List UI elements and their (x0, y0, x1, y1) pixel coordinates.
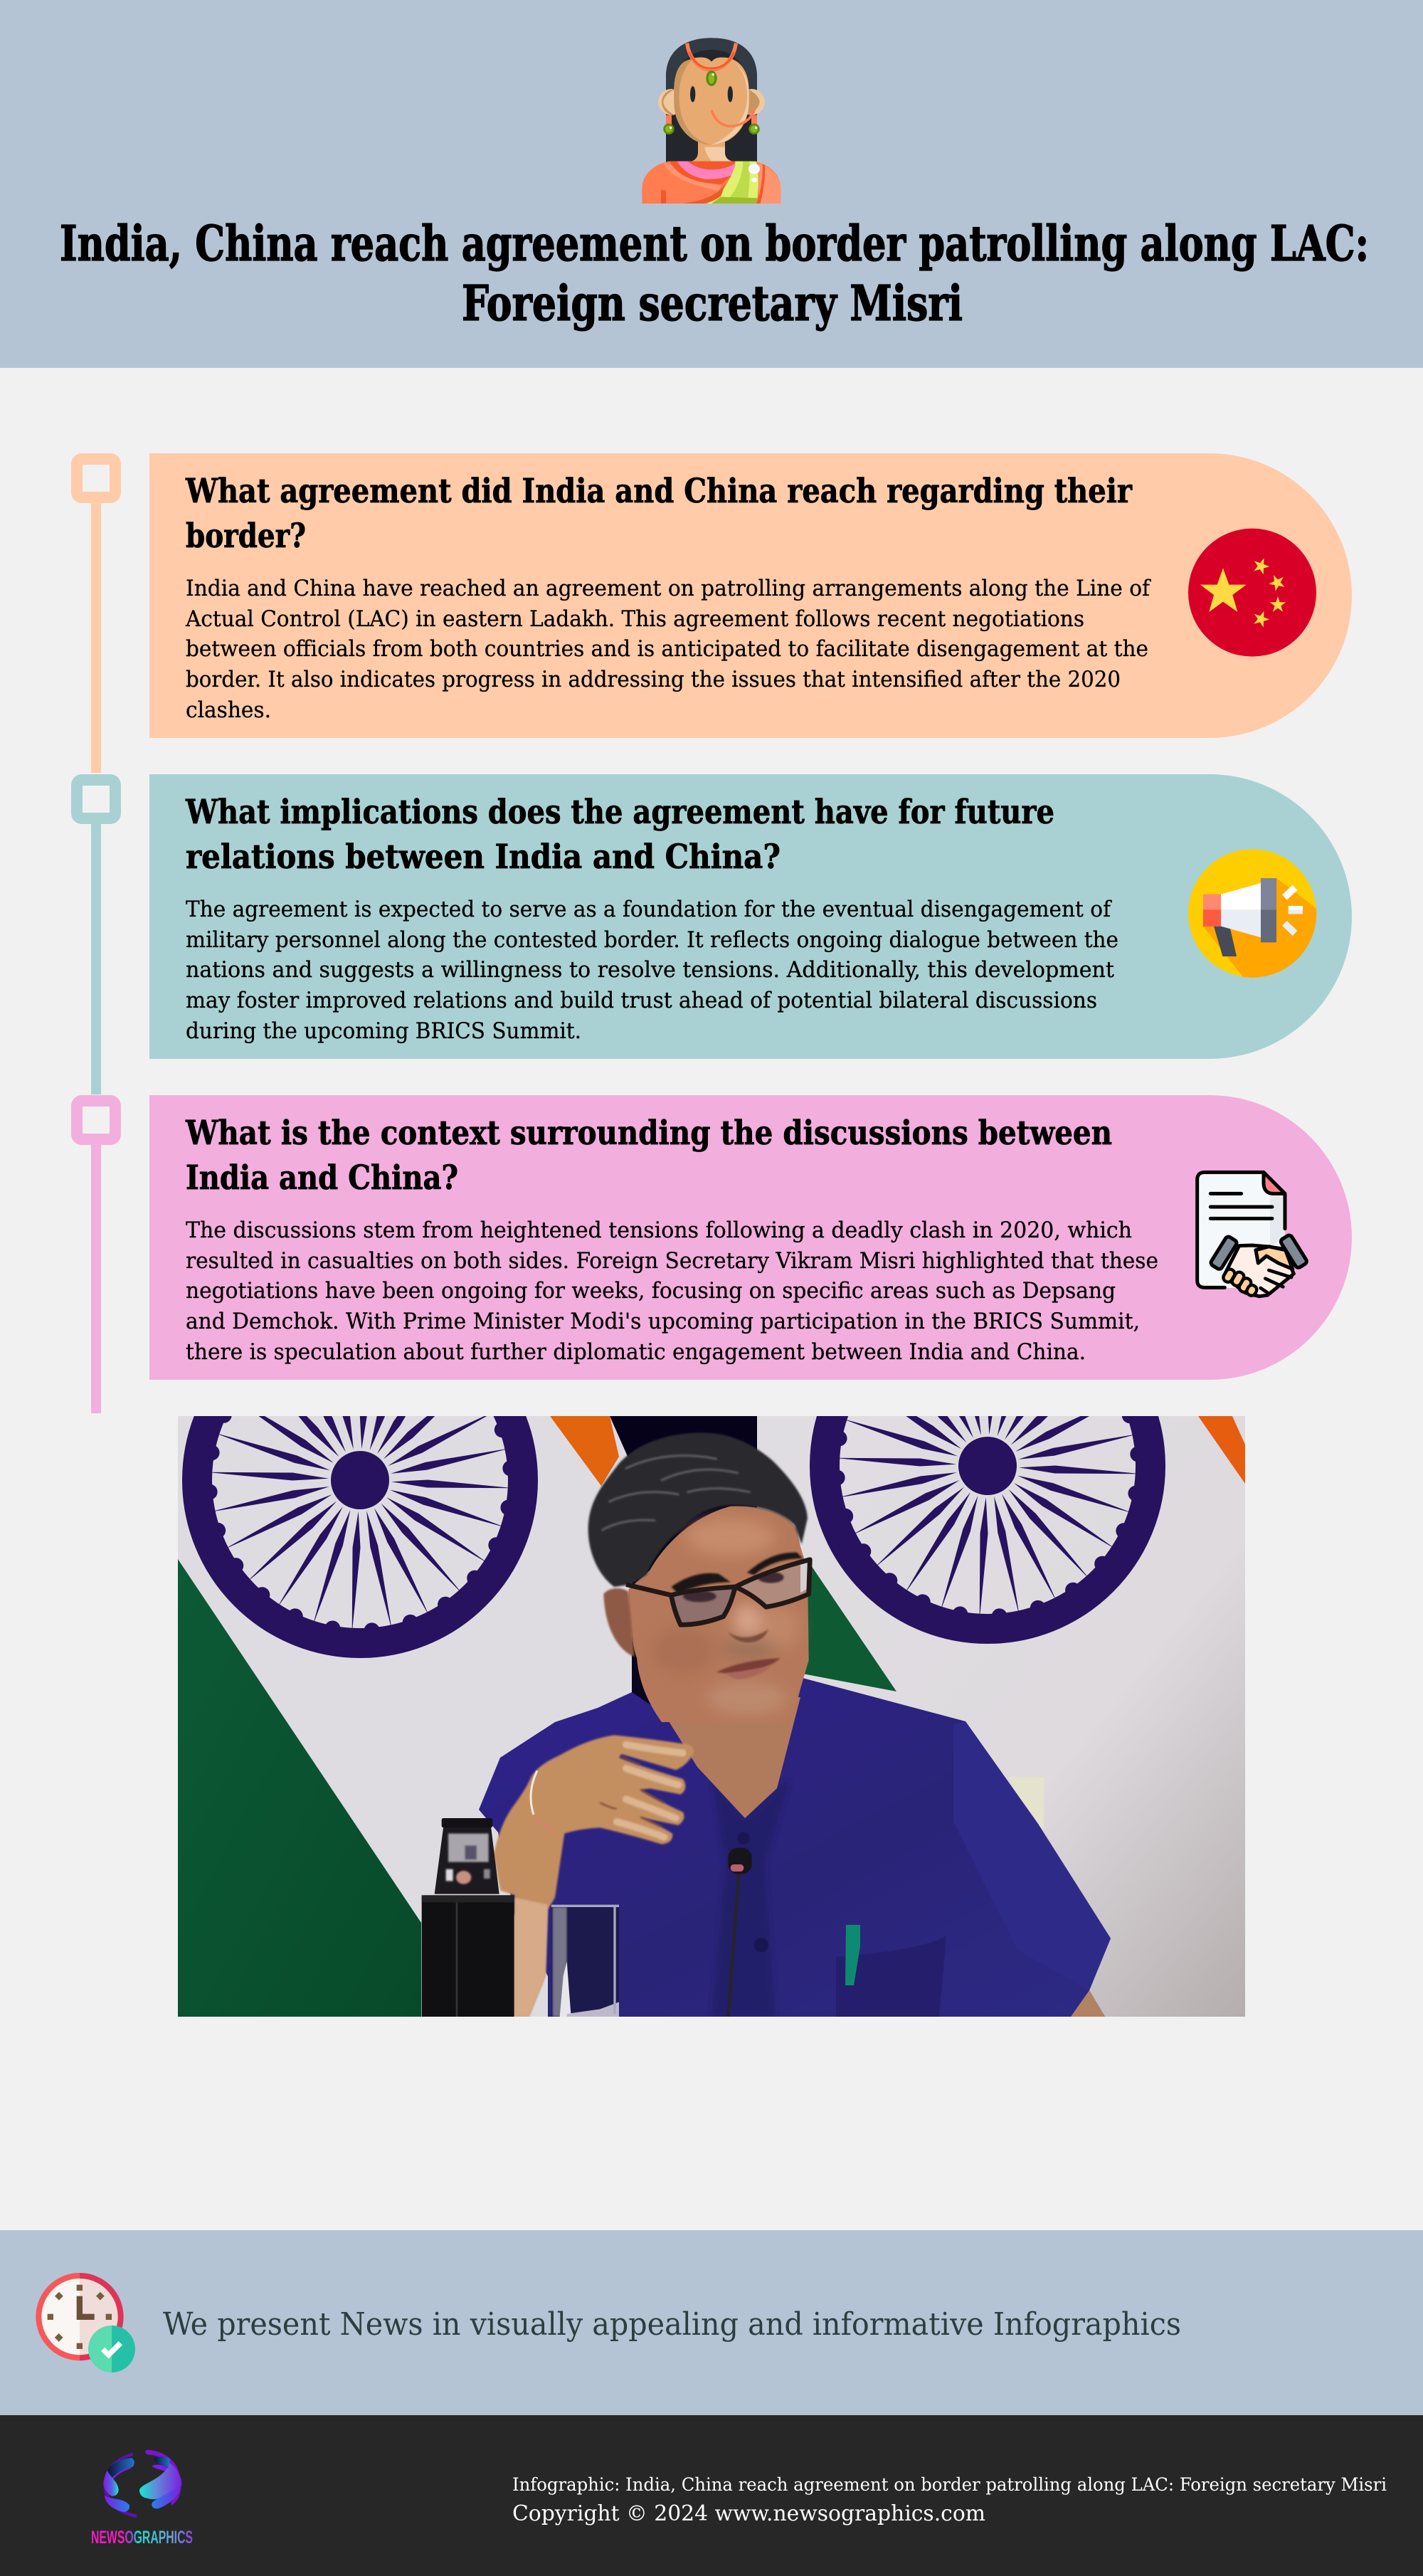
panel: card 3 (149, 1095, 1352, 1380)
title: Foreign secretary Misri (462, 275, 963, 332)
person: head with hair, face and glasses (588, 1432, 810, 1722)
text: card 1 body: between officials from both countries and is anticipated to facilitate disengagement at the (186, 636, 1148, 662)
text: card 1 body: Actual Control (LAC) in eastern Ladakh. This agreement follows recent negotiations (185, 606, 1084, 632)
heading: card 1 (185, 472, 1133, 556)
text: card 1 body: India and China have reached an agreement on patrolling arrangements along the Line of (186, 576, 1151, 601)
icon: document with handshake (1197, 1172, 1308, 1297)
title (60, 216, 1369, 332)
logo: Newsographics: NEWSOGRAPHICS (91, 2528, 193, 2548)
icon: megaphone (1188, 849, 1316, 978)
panel: card 2 (149, 774, 1352, 1059)
timeline: vertical connector with nodes (71, 453, 121, 1413)
text: card 3 body: there is speculation about further diplomatic engagement between India and China. (186, 1339, 1086, 1365)
icon: China flag (1188, 529, 1316, 657)
text: card 2 body: nations and suggests a willingness to resolve tensions. Additionally, this development (186, 957, 1114, 983)
timeline tail (91, 1380, 101, 1413)
far forearm (1071, 1990, 1105, 2017)
photo: Foreign Secretary Vikram Misri at press briefing (178, 1416, 1245, 2017)
text: copyright: Copyright © 2024 www.newsographics.com (512, 2501, 985, 2526)
text: card 2 body: The agreement is expected to serve as a foundation for the eventual disengagement of (186, 897, 1112, 922)
panel: card 1 (149, 453, 1352, 738)
text: card 2 body (186, 897, 1118, 1044)
text: card 2 body: military personnel along the contested border. It reflects ongoing dialogue between the (186, 927, 1118, 953)
panel: header (0, 0, 1423, 368)
panel: footer (0, 2415, 1423, 2576)
bottle, arm and hand, water glass, microphone (422, 1735, 768, 2017)
text: card 3 body: negotiations have been ongoing for weeks, focusing on specific areas such as Depsang (186, 1278, 1116, 1304)
text: card 3 body: and Demchok. With Prime Minister Modi's upcoming participation in the BRICS Summit, (186, 1309, 1140, 1334)
text: card 3 body (186, 1218, 1158, 1365)
text: card 3 body: resulted in casualties on both sides. Foreign Secretary Vikram Misri highlighted that these (186, 1248, 1158, 1274)
heading: card 2: What implications does the agreement have for future (185, 793, 1054, 832)
text: card 1 body (185, 576, 1151, 723)
text: card 2 body: may foster improved relations and build trust ahead of potential bilateral discussions (186, 988, 1097, 1013)
heading: card 2 (185, 793, 1054, 877)
logo: Newsographics (91, 2450, 193, 2548)
panel: tagline band (0, 2230, 1423, 2415)
heading: card 3: What is the context surrounding the discussions between (185, 1114, 1112, 1153)
icon: clock with check (36, 2273, 135, 2372)
heading: card 3: India and China? (186, 1158, 458, 1198)
text: card 2 body: during the upcoming BRICS Summit. (186, 1018, 581, 1044)
pen (845, 1925, 860, 1985)
text: card 3 body: The discussions stem from heightened tensions following a deadly clash in 2020, which (186, 1218, 1132, 1243)
text: infographic credit: Infographic: India, China reach agreement on border patrolling along LAC: Foreign secretary Misri (512, 2474, 1387, 2495)
heading: card 2: relations between India and China? (186, 838, 781, 877)
text: card 1 body: clashes. (186, 697, 271, 723)
icon: woman in sari (642, 38, 781, 204)
heading: card 1: border? (186, 517, 306, 556)
tagline text: We present News in visually appealing and informative Infographics (163, 2306, 1181, 2343)
text: card 1 body: border. It also indicates progress in addressing the issues that intensified after the 2020 (186, 667, 1121, 692)
heading: card 1: What agreement did India and China reach regarding their (185, 472, 1133, 511)
heading: card 3 (185, 1114, 1112, 1198)
